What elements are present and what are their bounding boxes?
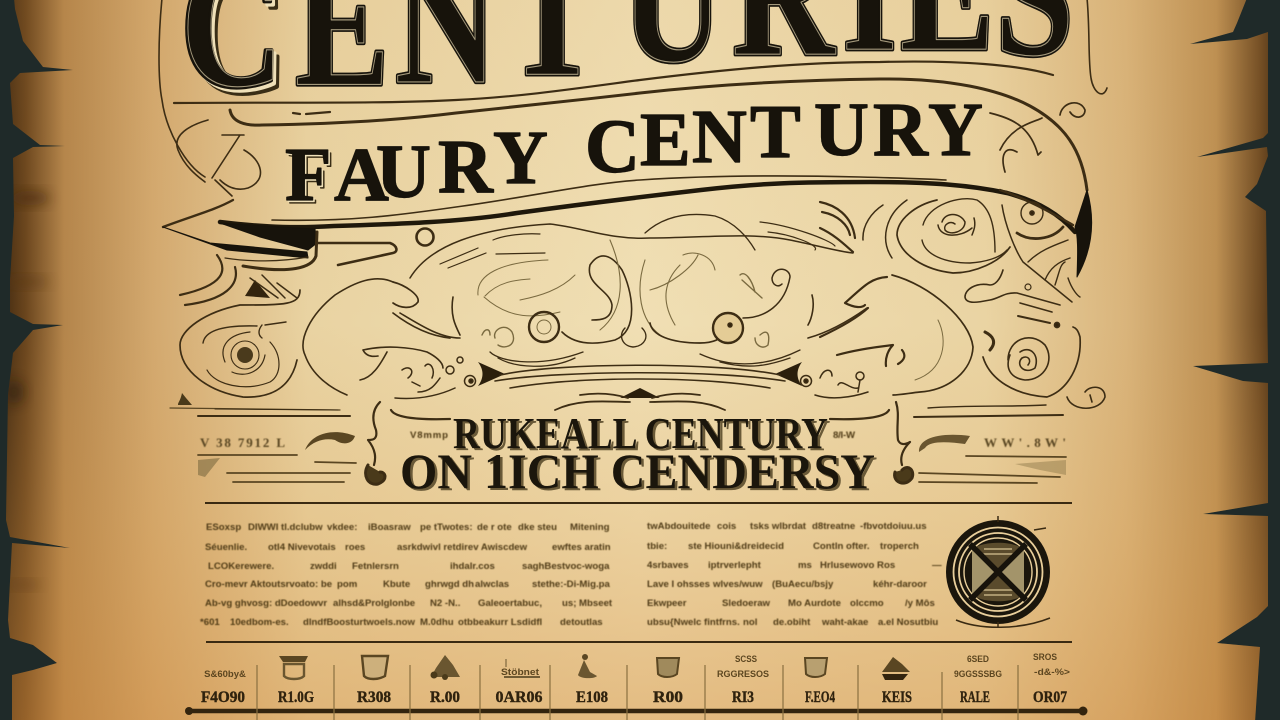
heading: FAURY CENTURY: FAURY CENTURY — [285, 88, 983, 217]
timeline cell 5: 0AR06 — [496, 689, 542, 706]
text block: right column: nol — [743, 617, 757, 628]
timeline cell 9: F.EO4 — [805, 689, 835, 706]
text block: left column: detoutlas — [560, 617, 603, 628]
text block: left column: asrkdwivl retdirev Awiscdew — [397, 542, 528, 553]
text block: left column: otbbeakurr Lsdidfl — [458, 617, 542, 628]
timeline cell 12: OR07 — [1033, 689, 1067, 706]
text block: right column: Contln ofter. — [813, 541, 870, 552]
text block: left column: roes — [345, 542, 365, 553]
text block: right column: wlves/wuw — [712, 579, 763, 590]
timeline cell 12 — [1033, 652, 1070, 706]
text block: right column: troperch — [880, 541, 919, 552]
text block: left column: ewftes aratin — [552, 542, 611, 553]
text block: right column: Ekwpeer — [647, 598, 687, 609]
swirl: left of subtitle — [177, 120, 260, 196]
timeline cell 9 — [805, 658, 835, 706]
timeline cell 2: R1.0G — [278, 689, 314, 706]
timeline cell 6 — [576, 654, 608, 706]
text block: right column: Lave I ohsses — [647, 579, 710, 590]
timeline cell 11: 9GGSSSBG — [954, 669, 1002, 680]
text block: left column: Fetnlersrn — [352, 561, 399, 572]
timeline cell 8: SCSS — [735, 654, 757, 665]
subtitle line 1: RUKEALL CENTURY — [456, 411, 830, 460]
text block: left column: ESoxsp — [206, 522, 241, 533]
timeline cell 1 — [201, 669, 246, 706]
text block: left column: stethe:-Di-Mig.pa — [532, 579, 610, 590]
text block: left column: LCOKerewere. — [208, 561, 274, 572]
text block: right column: kéhr-daroor — [873, 579, 927, 590]
text block: right column: -fbvotdoiuu.us — [860, 521, 927, 532]
timeline cell 8 — [717, 654, 769, 706]
ornament: central flourish — [400, 214, 867, 410]
text block: right column: tbie: — [647, 541, 667, 552]
timeline cell 11: RALE — [960, 689, 990, 706]
ribbon right blade — [1075, 190, 1092, 277]
text block: right column: Mo Aurdote — [788, 598, 841, 609]
timeline cell 10 — [882, 657, 912, 706]
timeline cell 11: 6SED — [967, 654, 989, 665]
text block: left column: iBoasraw — [368, 522, 411, 533]
text block: right column: twAbdouitede — [647, 521, 710, 532]
text block: right column: tsks wlbrdat — [750, 521, 807, 532]
timeline cell 6: E108 — [576, 689, 608, 706]
text block: left column: de r ote — [477, 522, 512, 533]
text block: right column: cois — [717, 521, 736, 532]
side caption left: V 38 7912 L — [200, 435, 285, 450]
timeline cell 7 — [653, 658, 683, 706]
side caption right: WW'.8W' — [984, 435, 1066, 450]
text block: right column: Hrlusewovo Ros — [820, 560, 895, 571]
text block: left column: M.0dhu — [420, 617, 454, 628]
text block: right column: d8treatne — [812, 521, 855, 532]
divider bottom — [206, 641, 1072, 643]
text block: left column: Séuenlie. — [205, 542, 247, 553]
timeline cell 3 — [357, 656, 391, 706]
timeline cell 4: R.00 — [430, 689, 460, 706]
text block: left column: pe tTwotes: — [420, 522, 473, 533]
subtitle line 1: RUKEALL CENTURY — [453, 409, 828, 458]
text block: left column: alhsd&Prolglonbe — [333, 598, 415, 609]
timeline cell 12: -d&-%> — [1034, 667, 1070, 678]
text block: right column: a.el Nosutbiu — [878, 617, 938, 628]
heading: FAURY CENTURY: FAURY CENTURY — [286, 88, 983, 218]
timeline cell 3: R308 — [357, 689, 391, 706]
text block: left column: ghrwgd dh — [425, 579, 474, 590]
timeline cell 4 — [430, 655, 460, 706]
subtitle frame and side panels — [198, 402, 1066, 484]
subtitle line 2: ON 1ICH CENDERSY — [400, 443, 875, 499]
text block: left column — [200, 522, 613, 628]
ornament: left scroll and spiral — [170, 255, 450, 410]
text block: right column: 4srbaves — [647, 560, 689, 571]
timeline cell 5: Stöbnet — [501, 667, 540, 678]
timeline axis — [185, 665, 1088, 720]
heading: FAURY CENTURY: FAURY CENTURY — [288, 88, 983, 220]
small caption left of subtitle: V8mmp — [410, 430, 448, 441]
text block: left column: DIWWI tl.dclubw — [248, 522, 323, 533]
text block: left column: dke steu — [518, 522, 557, 533]
text block: right column: ubsu{Nwelc fintfrns. — [647, 617, 740, 628]
text block: left column: Mitening — [570, 522, 610, 533]
text block: right column — [647, 521, 942, 628]
text block: right column: de.obiht — [773, 617, 811, 628]
text block: right column: Sledoeraw — [722, 598, 771, 609]
timeline cell 5 — [496, 659, 542, 706]
text block: right column: waht-akae — [821, 617, 868, 628]
timeline cell 10: KEIS — [882, 689, 912, 706]
text block: right column: — — [932, 560, 942, 571]
text block: left column: Cro-mevr Aktoutsrvoato: be — [205, 579, 332, 590]
subtitle line 2: ON 1ICH CENDERSY — [402, 445, 878, 501]
icon: round seal — [946, 516, 1050, 628]
timeline cell 7: R00 — [653, 689, 683, 706]
text block: left column: vkdee: — [327, 522, 357, 533]
text block: left column: 10edbom-es. — [230, 617, 289, 628]
text block: left column: *601 — [200, 617, 220, 628]
text block: left column: otl4 Nivevotais — [268, 542, 336, 553]
text block: left column: ihdalr.cos — [450, 561, 495, 572]
text block: left column: us; Mbseet — [562, 598, 613, 609]
text block: right column: iptrverlepht — [708, 560, 762, 571]
text block: left column: Galeoertabuc, — [478, 598, 542, 609]
text block: left column: dlndfBoosturtwoels.now — [303, 617, 415, 628]
text block: left column: zwddi — [310, 561, 337, 572]
text block: left column: Ab-vg ghvosg: dDoedowvr — [205, 598, 327, 609]
timeline cell 2 — [278, 656, 314, 706]
timeline cell 11 — [954, 654, 1002, 706]
small caption right of subtitle: 8/I-W — [833, 430, 856, 441]
text block: right column: olccmo — [850, 598, 884, 609]
text block: left column: N2 -N.. — [430, 598, 460, 609]
timeline cell 1: S&60by& — [204, 669, 246, 680]
text block: left column: alwclas — [475, 579, 509, 590]
text block: right column: /y Môs — [905, 598, 935, 609]
text block: right column: ms — [798, 560, 812, 571]
timeline cell 12: SROS — [1033, 652, 1057, 663]
text block: right column: (BuAecu/bsjy — [772, 579, 834, 590]
timeline cell 8: RI3 — [732, 689, 754, 706]
text block: left column: pom — [337, 579, 357, 590]
text block: left column: saghBestvoc-woga — [522, 561, 610, 572]
timeline cell 8: RGGRESOS — [717, 669, 769, 680]
text block: right column: ste Hiouni&dreidecid — [688, 541, 784, 552]
ornament: right scroll and spiral — [820, 199, 1105, 408]
swirl: right of subtitle — [990, 103, 1085, 172]
ribbon left tail — [163, 200, 396, 270]
timeline cell 1: F4O90 — [201, 689, 245, 706]
banner ribbon outlines — [159, 0, 1107, 277]
text block: left column: Kbute — [383, 579, 410, 590]
ornament: small scroll dots left and right — [395, 357, 868, 398]
divider top — [205, 502, 1072, 504]
